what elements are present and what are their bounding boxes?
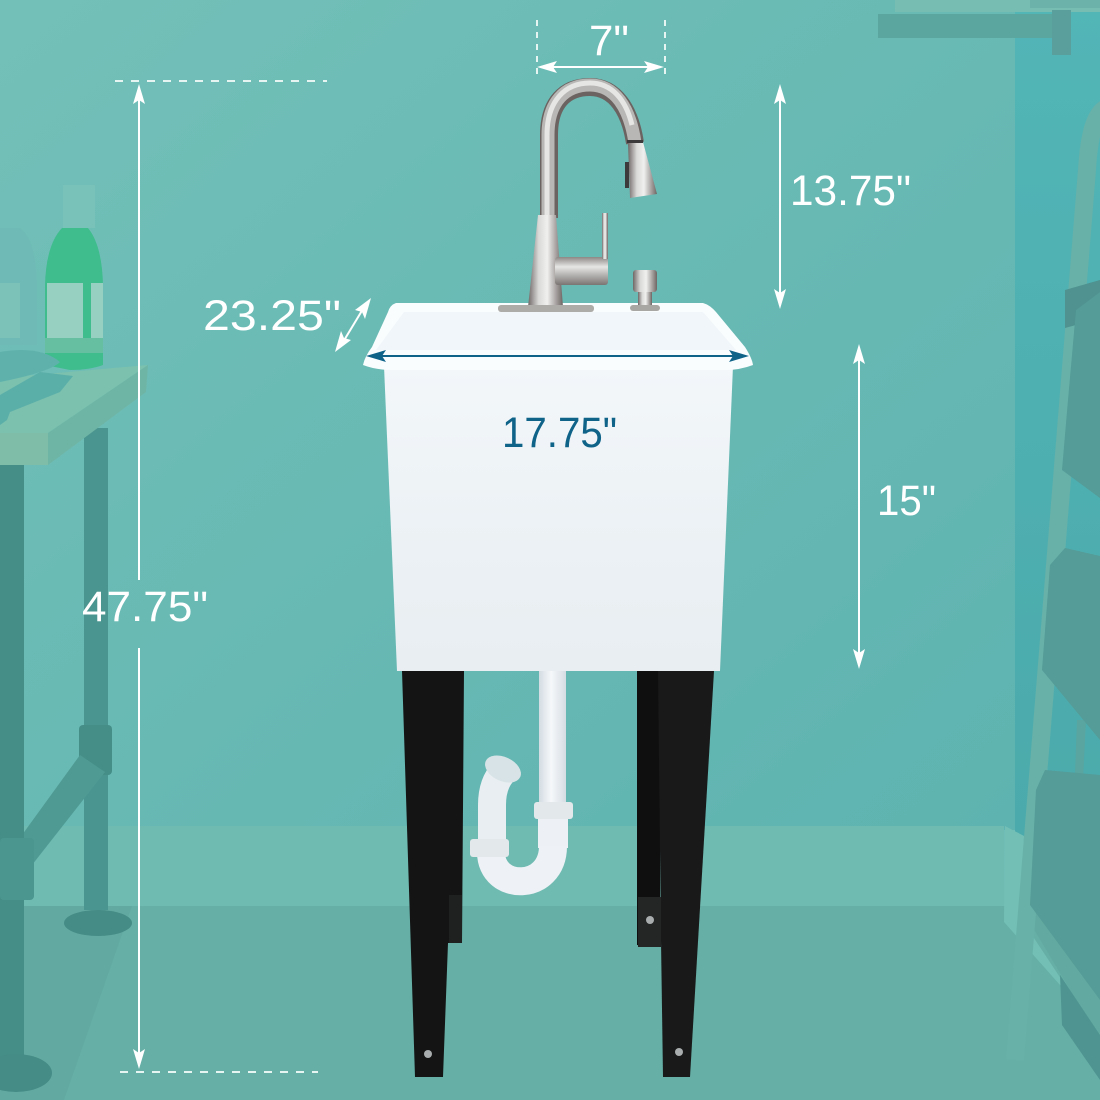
faucet xyxy=(498,83,657,312)
handle body xyxy=(555,257,608,285)
alcove wall xyxy=(1015,0,1100,960)
bottles xyxy=(0,185,103,370)
front flange xyxy=(0,1054,52,1092)
bracket xyxy=(1065,280,1100,328)
step 2 xyxy=(1042,548,1100,740)
dimension: total height 47.75 in: 47.75" xyxy=(82,583,208,631)
dimension: width 17.75 in xyxy=(366,350,749,457)
step 1 xyxy=(1062,292,1100,498)
spray head xyxy=(628,142,657,198)
dimension: depth 23.25 in: 23.25" xyxy=(203,292,341,340)
floor xyxy=(0,906,1100,1100)
front rail xyxy=(1015,108,1100,1060)
front pipe leg xyxy=(0,465,24,1060)
dimension: total height 47.75 in xyxy=(82,81,327,1072)
lever xyxy=(602,213,608,259)
towels xyxy=(0,350,73,425)
sink xyxy=(363,83,753,1077)
tub inner xyxy=(376,312,736,350)
dimension: faucet height 13.75 in: 13.75" xyxy=(790,167,911,215)
back pipe leg xyxy=(84,428,108,910)
diagonal brace xyxy=(22,755,105,865)
back flange xyxy=(64,910,132,936)
ladder xyxy=(1015,108,1100,1080)
tub rim xyxy=(363,303,753,370)
dimension: basin depth 15 in xyxy=(853,344,936,669)
floor board seam xyxy=(64,906,1100,1100)
lower leg xyxy=(1060,975,1100,1080)
green bottle xyxy=(45,228,103,370)
faucet base xyxy=(528,215,563,307)
dimension: faucet spread 7 in xyxy=(537,17,665,80)
dimension: width 17.75 in: 17.75" xyxy=(502,409,617,457)
baseboard xyxy=(0,826,1004,908)
back rail xyxy=(1074,720,1086,800)
dimension: faucet spread 7 in: 7" xyxy=(589,17,629,65)
dimension: faucet height 13.75 in xyxy=(774,84,911,309)
clear bottle xyxy=(0,228,37,345)
deck plate xyxy=(498,305,594,312)
step 3 xyxy=(1030,770,1100,1000)
alcove baseboard xyxy=(1004,826,1075,1000)
table top xyxy=(0,365,148,433)
right leg xyxy=(637,671,714,1077)
p-trap drain xyxy=(470,671,573,881)
table with pipe legs xyxy=(0,365,148,1092)
left leg xyxy=(402,671,464,1077)
wall xyxy=(0,0,1016,830)
bottle neck glow xyxy=(63,185,95,228)
tub basin xyxy=(384,366,733,671)
soap dispenser xyxy=(630,270,660,311)
dimension: basin depth 15 in: 15" xyxy=(877,477,936,525)
gooseneck xyxy=(549,87,635,218)
top right wall pipe xyxy=(878,0,1100,55)
dimension: depth 23.25 in xyxy=(203,292,371,352)
